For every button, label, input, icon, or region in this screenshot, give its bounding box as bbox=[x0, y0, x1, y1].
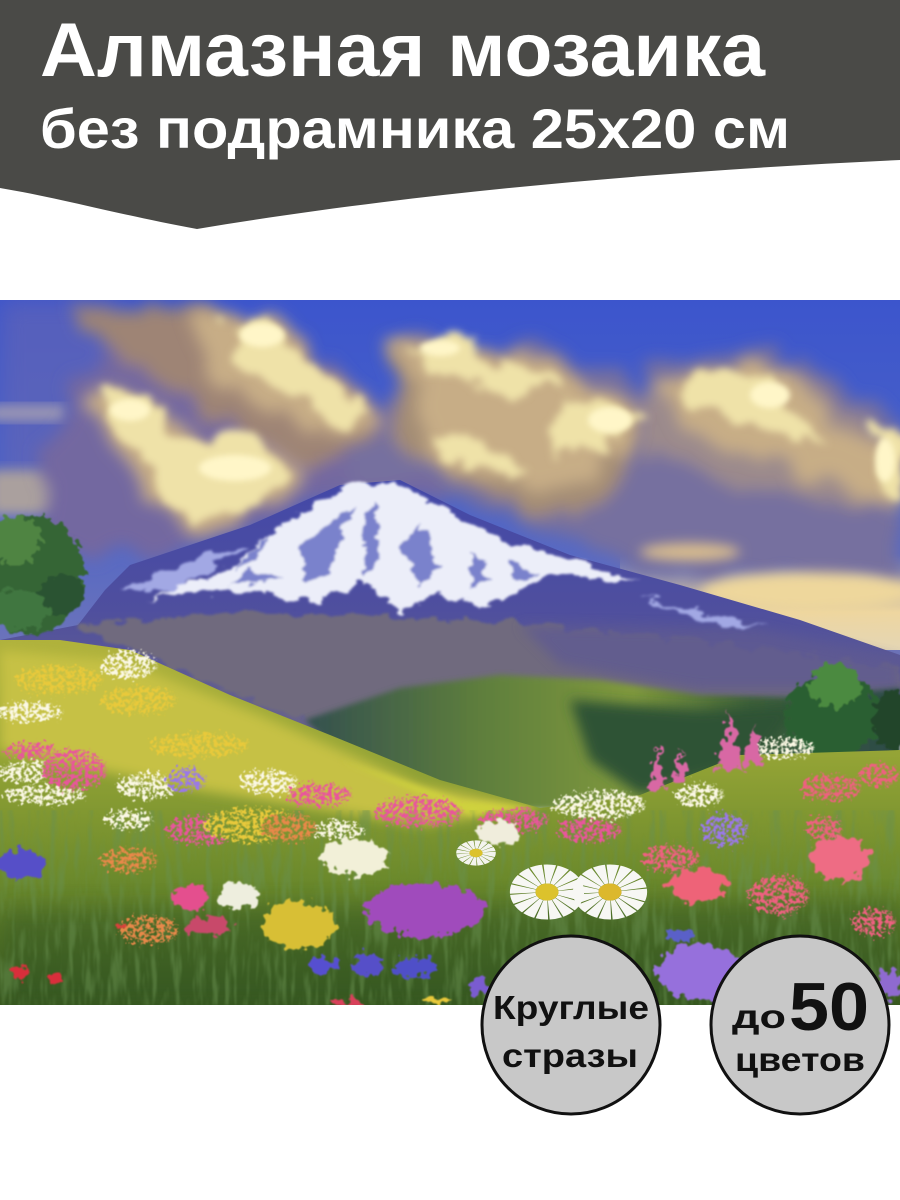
title: Алмазная мозаика bbox=[40, 8, 766, 93]
mountain bbox=[0, 480, 900, 740]
badge: up to 50 colours: до bbox=[732, 998, 786, 1035]
snow cap bbox=[120, 482, 770, 628]
badge: up to 50 colours bbox=[711, 936, 889, 1114]
tree right bbox=[786, 663, 900, 759]
clouds bbox=[44, 310, 900, 612]
badge: round rhinestones: Круглые bbox=[493, 989, 649, 1026]
distant green hills bbox=[305, 675, 900, 810]
header banner bbox=[0, 0, 900, 229]
subtitle: без подрамника 25х20 см bbox=[40, 97, 790, 160]
fireweed spikes bbox=[648, 710, 763, 790]
badge: round rhinestones: стразы bbox=[502, 1037, 638, 1074]
daisy small bbox=[463, 845, 489, 861]
badge: up to 50 colours: цветов bbox=[735, 1041, 865, 1078]
sky bbox=[0, 300, 900, 655]
cloud mid-tones bbox=[90, 315, 900, 540]
badge: up to 50 colours: 50 bbox=[789, 969, 869, 1045]
tree left bbox=[0, 515, 86, 635]
wildflowers bbox=[0, 651, 900, 944]
daisy left bbox=[523, 874, 571, 910]
daisies bbox=[463, 845, 634, 910]
daisy right bbox=[586, 874, 634, 910]
dense flower clusters bbox=[0, 820, 900, 1007]
dark forest valley bbox=[570, 700, 800, 795]
meadow bbox=[0, 640, 900, 1005]
landscape painting: mountain and meadow bbox=[0, 300, 900, 1007]
badge: round rhinestones bbox=[482, 936, 660, 1114]
